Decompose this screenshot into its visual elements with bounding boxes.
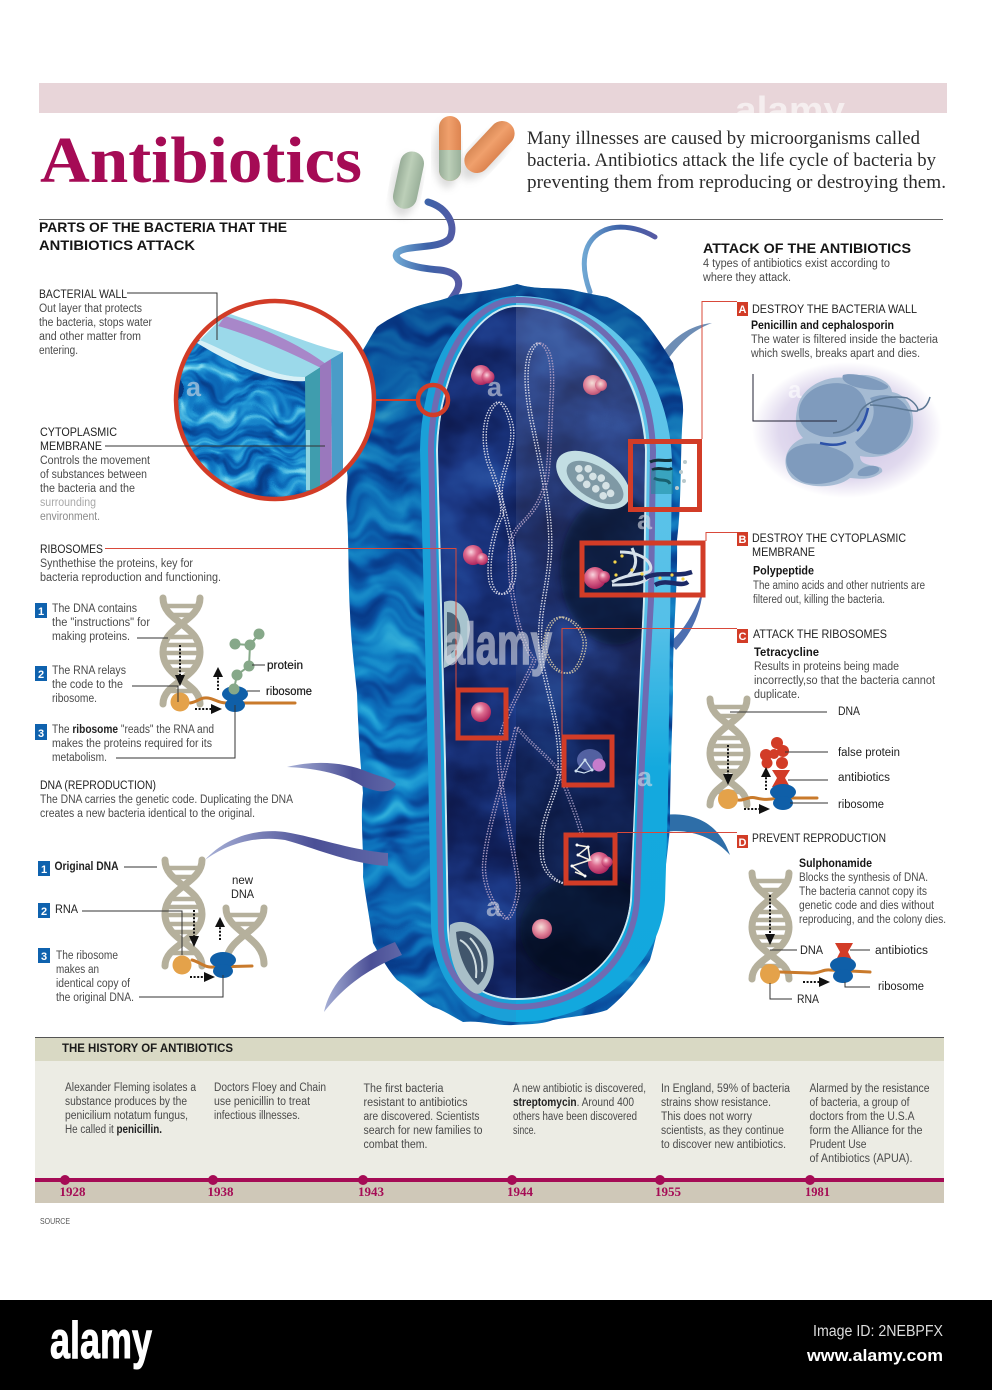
- step 3: 3: [38, 728, 44, 740]
- entry 1981: of bacteria, a group of: [810, 1097, 910, 1109]
- diagram: protein synthesis: protein: [267, 660, 303, 672]
- block: DNA reproduction: [40, 780, 293, 820]
- diagram: blocked ribosome: [752, 873, 928, 1006]
- entry 1955: to discover new antibiotics.: [661, 1139, 786, 1151]
- panel A: destroy the wall: [737, 302, 939, 360]
- footer bar: [0, 1300, 992, 1390]
- step 2: the code to the: [52, 679, 123, 691]
- diagram: blocked ribosome: RNA: [797, 994, 819, 1006]
- panel B: destroy the membrane: filtered out, killing the bacteria.: [753, 594, 885, 606]
- chromosome strands: [482, 343, 586, 919]
- diagram: false protein: DNA: [838, 706, 860, 718]
- entry 1928: Alexander Fleming isolates a: [65, 1082, 197, 1094]
- small circle marker and link: [373, 385, 448, 415]
- panel B: destroy the membrane: DESTROY THE CYTOPLASMIC: [752, 533, 906, 545]
- diagram: false protein: antibiotics: [838, 772, 890, 784]
- section heading: parts of the bacteria: [39, 219, 287, 253]
- callout: bacterial wall: [39, 289, 217, 357]
- antibiotic A attached to wall: [650, 460, 687, 494]
- title: Antibiotics: [40, 124, 362, 197]
- entry 1943: search for new families to: [364, 1125, 482, 1137]
- organelle: lower vacuole: [449, 922, 494, 994]
- diagram: blocked ribosome: antibiotics: [875, 945, 928, 957]
- callout: bacterial wall: BACTERIAL WALL: [39, 289, 128, 301]
- red highlight boxes: [458, 442, 703, 883]
- rule under header: [39, 218, 943, 220]
- watermark marks: alamy: [735, 89, 845, 130]
- step 3: metabolism.: [52, 752, 107, 764]
- diagram: false protein: ribosome: [838, 799, 884, 811]
- panel D: prevent reproduction: Blocks the synthesis of DNA.: [799, 872, 928, 884]
- step 2: 2: [38, 669, 44, 681]
- intro text: preventing them from reproducing or destroying them.: [527, 172, 946, 193]
- entry 1928: substance produces by the: [65, 1096, 187, 1108]
- step 1: 1: [38, 606, 44, 618]
- entry 1943: The first bacteria: [364, 1083, 444, 1095]
- panel: history of antibiotics: [35, 1037, 944, 1203]
- watermark marks: a: [788, 377, 802, 404]
- footer logo: alamy: [50, 1312, 152, 1370]
- panel A: destroy the wall: which swells, breaks apart and dies.: [750, 348, 920, 360]
- watermark marks: a: [637, 762, 653, 792]
- panel B: destroy the membrane: [737, 532, 925, 606]
- panel D: prevent reproduction: Sulphonamide: [799, 858, 872, 870]
- entry 1938: infectious illnesses.: [214, 1110, 300, 1122]
- steps: DNA copy: 1: [41, 864, 47, 876]
- watermark marks: [186, 89, 845, 922]
- entry 1955: strains show resistance.: [661, 1097, 771, 1109]
- callout: cytoplasmic membrane: of substances between: [40, 469, 147, 481]
- entry 1944: streptomycin. Around 400: [513, 1097, 634, 1109]
- entry 1944: others have been discovered: [513, 1111, 637, 1123]
- bacterium cell: [340, 280, 692, 1030]
- entry 1955: 1955: [655, 1185, 681, 1199]
- steps: DNA copy: [38, 861, 134, 1004]
- entry 1955: In England, 59% of bacteria: [661, 1083, 791, 1095]
- entry 1981: doctors from the U.S.A: [810, 1111, 915, 1123]
- steps: DNA copy: identical copy of: [56, 978, 131, 990]
- block: DNA reproduction: creates a new bacteria identical to the original.: [40, 808, 255, 820]
- callout: cytoplasmic membrane: the bacteria and the: [40, 483, 135, 495]
- step 3: [35, 724, 214, 764]
- antibiotic D molecule: [570, 844, 612, 878]
- entry 1981: of Antibiotics (APUA).: [810, 1153, 912, 1165]
- block: ribosomes: [35, 544, 221, 764]
- antibiotic B molecule: [584, 548, 692, 589]
- entry 1943: 1943: [358, 1185, 384, 1199]
- watermark marks: a: [486, 892, 502, 922]
- antibiotic C molecule: [574, 749, 606, 773]
- panel B: destroy the membrane: Polypeptide: [753, 566, 814, 578]
- block: ribosomes: Synthethise the proteins, key for: [40, 558, 193, 570]
- panel C: attack the ribosomes: Results in proteins being made: [754, 661, 899, 673]
- callout: cytoplasmic membrane: [40, 427, 325, 523]
- entry 1943: combat them.: [364, 1139, 428, 1151]
- panel D: prevent reproduction: PREVENT REPRODUCTION: [752, 833, 886, 845]
- step 2: The RNA relays: [52, 665, 126, 677]
- entry 1938: Doctors Floey and Chain: [214, 1082, 326, 1094]
- watermark marks: a: [487, 372, 503, 402]
- steps: DNA copy: 2: [41, 906, 47, 918]
- steps: DNA copy: the original DNA.: [56, 992, 134, 1004]
- cyan wall ring: [415, 290, 676, 1030]
- diagram: protein synthesis: ribosome: [266, 686, 312, 698]
- entry 1981: form the Alliance for the: [810, 1125, 922, 1137]
- intro text: bacteria. Antibiotics attack the life cycle of bacteria by: [527, 150, 936, 171]
- entry 1943: [358, 1083, 482, 1199]
- section heading: attack of the antibiotics: [702, 240, 911, 284]
- step 1: making proteins.: [52, 631, 130, 643]
- entry 1928: 1928: [60, 1185, 86, 1199]
- diagram: protein synthesis: [116, 598, 312, 758]
- step 1: The DNA contains: [52, 603, 137, 615]
- entry 1943: are discovered. Scientists: [364, 1111, 480, 1123]
- ribosome particles: [463, 365, 607, 939]
- entry 1944: since.: [513, 1125, 536, 1137]
- section heading: parts of the bacteria: PARTS OF THE BACTERIA THAT THE: [39, 219, 287, 235]
- step 2: [35, 665, 126, 705]
- entry 1944: [507, 1083, 646, 1199]
- entry 1981: 1981: [805, 1185, 830, 1199]
- watermark marks: a: [186, 372, 202, 402]
- diagram: blocked ribosome: DNA: [800, 945, 823, 957]
- steps: DNA copy: RNA: [55, 904, 78, 916]
- connector lines: [105, 302, 737, 832]
- panel A: destroy the wall: The water is filtered inside the bacteria: [751, 334, 939, 346]
- panel A: destroy the wall: Penicillin and cephalosporin: [751, 320, 894, 332]
- callout: cytoplasmic membrane: CYTOPLASMIC: [40, 427, 117, 439]
- panel C: attack the ribosomes: incorrectly,so that the bacteria cannot: [754, 675, 936, 687]
- entry 1981: Prudent Use: [810, 1139, 866, 1151]
- diagram: false protein: false protein: [838, 747, 900, 759]
- image id: Image ID: 2NEBPFX: [813, 1323, 944, 1340]
- entry 1981: [805, 1083, 930, 1199]
- entry 1938: 1938: [208, 1185, 234, 1199]
- panel D: prevent reproduction: The bacteria cannot copy its: [799, 886, 927, 898]
- entry 1928: He called it penicillin.: [65, 1124, 162, 1136]
- block: DNA reproduction: DNA (REPRODUCTION): [40, 780, 156, 792]
- diagram: false protein: [710, 699, 900, 814]
- panel C: attack the ribosomes: Tetracycline: [754, 647, 819, 659]
- panel C: attack the ribosomes: [737, 629, 936, 701]
- illustration: burst bacterium: [752, 362, 942, 498]
- timeline line: [35, 1178, 944, 1182]
- callout: bacterial wall: Out layer that protects: [39, 303, 142, 315]
- diagram: DNA duplication: new: [232, 875, 254, 887]
- panel D: prevent reproduction: reproducing, and the colony dies.: [799, 914, 946, 926]
- entry 1938: use penicillin to treat: [214, 1096, 311, 1108]
- entry 1928: [60, 1082, 197, 1199]
- entry 1928: penicilium notatum fungus,: [65, 1110, 188, 1122]
- magnified wall circle: [170, 300, 374, 505]
- panel C: attack the ribosomes: ATTACK THE RIBOSOMES: [753, 629, 887, 641]
- cytoplasmic membrane: [431, 300, 653, 1007]
- top face: [200, 313, 343, 377]
- callout: cytoplasmic membrane: environment.: [40, 511, 100, 523]
- history heading: THE HISTORY OF ANTIBIOTICS: [62, 1043, 233, 1055]
- diagram: blocked ribosome: ribosome: [878, 981, 924, 993]
- callout: cytoplasmic membrane: Controls the movement: [40, 455, 151, 467]
- entry 1955: scientists, as they continue: [661, 1125, 784, 1137]
- block: ribosomes: bacteria reproduction and functioning.: [40, 572, 221, 584]
- entry 1944: 1944: [507, 1185, 534, 1199]
- diagram: DNA duplication: DNA: [231, 889, 254, 901]
- top band: [39, 83, 947, 113]
- panel C: attack the ribosomes: duplicate.: [754, 689, 800, 701]
- entry 1944: A new antibiotic is discovered,: [513, 1083, 646, 1095]
- side bands: [305, 367, 320, 492]
- panel A: destroy the wall: A: [739, 304, 747, 316]
- callout: bacterial wall: and other matter from: [39, 331, 141, 343]
- panel C: attack the ribosomes: C: [739, 631, 747, 643]
- panel D: prevent reproduction: [737, 833, 946, 926]
- entry 1955: [655, 1083, 791, 1199]
- flagella behind the body: [396, 202, 730, 855]
- section heading: attack of the antibiotics: 4 types of antibiotics exist according to: [703, 258, 890, 270]
- cytoplasm: [438, 307, 645, 998]
- intro text: [527, 128, 946, 193]
- panel B: destroy the membrane: B: [739, 534, 747, 546]
- step 1: [35, 603, 150, 643]
- source note: SOURCE: [40, 1216, 70, 1226]
- steps: DNA copy: Original DNA: [54, 861, 118, 873]
- steps: DNA copy: makes an: [56, 964, 99, 976]
- step 2: ribosome.: [52, 693, 97, 705]
- icon: capsule pills: [387, 116, 520, 219]
- step 1: the "instructions" for: [52, 617, 150, 629]
- organelle: upper vacuole: [546, 439, 640, 521]
- section heading: parts of the bacteria: ANTIBIOTICS ATTACK: [39, 237, 195, 253]
- flagella over the body: [205, 763, 402, 1012]
- step 3: makes the proteins required for its: [52, 738, 212, 750]
- block: ribosomes: RIBOSOMES: [40, 544, 103, 556]
- outer wall texture: [340, 280, 690, 1030]
- block: DNA reproduction: The DNA carries the genetic code. Duplicating the DNA: [40, 794, 293, 806]
- watermark marks: alamy: [444, 612, 552, 677]
- section heading: attack of the antibiotics: ATTACK OF THE ANTIBIOTICS: [703, 240, 911, 256]
- panel B: destroy the membrane: The amino acids and other nutrients are: [753, 580, 925, 592]
- organelle: mid vacuole: [444, 601, 470, 668]
- callout: bacterial wall: the bacteria, stops water: [39, 317, 152, 329]
- panel D: prevent reproduction: genetic code and dies without: [799, 900, 935, 912]
- panel D: prevent reproduction: D: [739, 837, 747, 849]
- inner pale line: [437, 306, 646, 999]
- callout: bacterial wall: entering.: [39, 345, 78, 357]
- callout: cytoplasmic membrane: MEMBRANE: [40, 441, 102, 453]
- entry 1938: [208, 1082, 326, 1199]
- steps: DNA copy: 3: [41, 951, 47, 963]
- section heading: attack of the antibiotics: where they attack.: [702, 272, 791, 284]
- step 3: The ribosome "reads" the RNA and: [52, 724, 214, 736]
- entry 1955: This does not worry: [661, 1111, 752, 1123]
- panel A: destroy the wall: DESTROY THE BACTERIA WALL: [752, 304, 918, 316]
- website: www.alamy.com: [806, 1346, 943, 1365]
- entry 1943: resistant to antibiotics: [364, 1097, 468, 1109]
- watermark marks: a: [637, 505, 653, 535]
- panel B: destroy the membrane: MEMBRANE: [752, 547, 815, 559]
- steps: DNA copy: The ribosome: [56, 950, 118, 962]
- callout: cytoplasmic membrane: surrounding: [40, 497, 96, 509]
- entry 1981: Alarmed by the resistance: [810, 1083, 930, 1095]
- intro text: Many illnesses are caused by microorganisms called: [527, 128, 920, 149]
- diagram: DNA duplication: [82, 860, 264, 997]
